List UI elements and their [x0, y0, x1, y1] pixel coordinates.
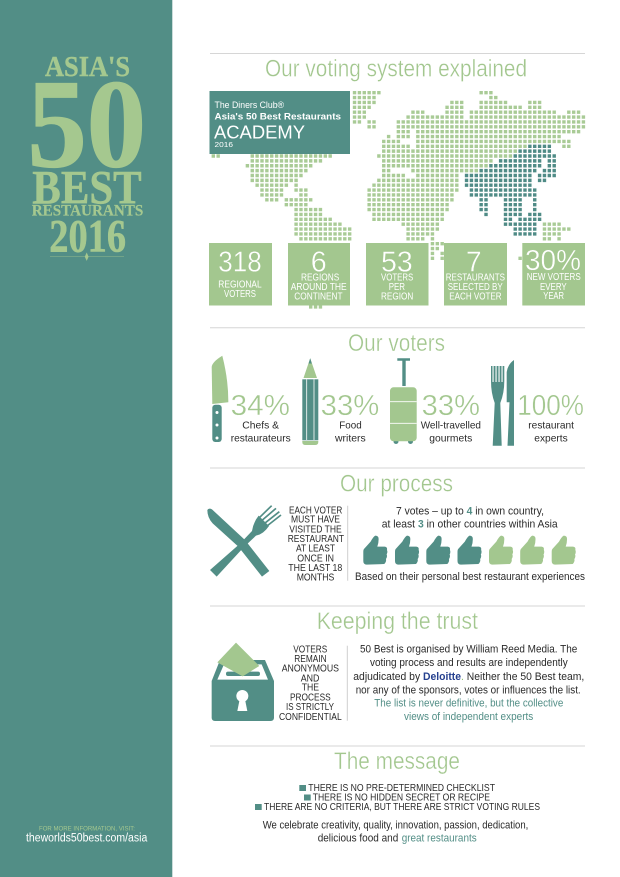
footer link: [26, 826, 148, 845]
stat: 30% new voters: YEAR: [543, 291, 564, 302]
heading: our process: Our process: [340, 470, 453, 498]
stat: 30% new voters: EVERY: [540, 282, 567, 293]
panel: academy title box: The Diners Club®: [214, 100, 284, 111]
text: visit requirement: RESTAURANT: [288, 534, 344, 545]
stat: 7 restaurants selected: RESTAURANTS: [446, 273, 505, 284]
text: closing statement: great restaurants: [402, 833, 477, 845]
icon: ballot box with lock: [212, 643, 274, 721]
icon: fork and knife: [491, 360, 514, 446]
stat: 6 regions: 6: [311, 247, 327, 279]
text: voters anonymous: [279, 645, 342, 723]
text: closing statement: [263, 819, 528, 845]
panel: academy title box: [210, 91, 350, 154]
text: visit requirement: AT LEAST: [296, 544, 335, 555]
list: message bullets: THERE IS NO PRE-DETERMINED CHECKLIST: [308, 783, 495, 794]
text: organisation paragraph: The list is never definitive, but the collective: [374, 698, 563, 710]
icon: suitcase: [390, 358, 417, 444]
text: voters anonymous: ANONYMOUS: [282, 664, 339, 675]
stat: 33% food writers: Food: [339, 419, 362, 431]
stat: 318 regional voters: VOTERS: [224, 289, 256, 300]
text: visit requirement: MUST HAVE: [291, 515, 340, 526]
stat: 34% chefs: 34%: [231, 390, 290, 422]
list: message bullets: THERE IS NO HIDDEN SECRET OR RECIPE: [313, 792, 490, 803]
panel: sidebar: [0, 0, 172, 877]
stat: 34% chefs: [231, 390, 291, 445]
text: voters anonymous: THE: [302, 683, 319, 694]
text: votes rule: [382, 505, 559, 531]
icon row: seven thumbs up: [363, 536, 576, 565]
logo: Asia's 50 Best Restaurants 2016: ASIA'S: [45, 52, 130, 83]
stat: 53 voters per region: VOTERS: [381, 273, 413, 284]
heading: the message: The message: [334, 748, 460, 775]
stat: 34% chefs: Chefs &: [242, 419, 279, 431]
text: personal experiences: Based on their personal best restaurant experiences: [355, 571, 585, 583]
panel: academy title box: 2016: [214, 140, 233, 149]
stat: 7 restaurants selected: [444, 243, 507, 306]
text: organisation paragraph: voting process and results are independently: [370, 657, 568, 669]
stat: 33% food writers: [321, 390, 379, 445]
text: voters anonymous: CONFIDENTIAL: [279, 712, 342, 723]
icon: chef knife: [212, 356, 228, 442]
text: voters anonymous: REMAIN: [294, 654, 327, 665]
stat: 33% food writers: 33%: [321, 390, 379, 422]
icon: pencil: [302, 358, 318, 445]
text: closing statement: delicious food and: [318, 833, 398, 845]
stat: 6 regions: CONTINENT: [294, 292, 343, 303]
stat: 6 regions: REGIONS: [301, 273, 339, 284]
footer link: FOR MORE INFORMATION, VISIT:: [39, 826, 135, 833]
heading: keeping the trust: Keeping the trust: [317, 608, 478, 635]
stat: 33% gourmets: [421, 390, 481, 445]
stat: 7 restaurants selected: 7: [466, 247, 482, 279]
logo: Asia's 50 Best Restaurants 2016: 2016: [49, 211, 126, 263]
stat: 53 voters per region: REGION: [381, 292, 413, 303]
stat: 318 regional voters: 318: [218, 247, 262, 279]
stat: 33% gourmets: gourmets: [429, 433, 472, 445]
text: closing statement: We celebrate creativity, quality, innovation, passion, dedication,: [263, 819, 528, 831]
text: votes rule: at least 3 in other countries within Asia: [382, 519, 559, 531]
stat: 30% new voters: [522, 243, 585, 306]
text: organisation paragraph: 50 Best is organised by William Reed Media. The: [360, 644, 577, 656]
stat: 53 voters per region: [366, 243, 428, 306]
heading: our voting system explained: Our voting system explained: [265, 56, 527, 82]
stat: 6 regions: [288, 243, 350, 306]
stat: 33% gourmets: 33%: [422, 390, 480, 422]
text: visit requirement: ONCE IN: [297, 553, 334, 564]
stat: 53 voters per region: 53: [381, 247, 413, 279]
text: visit requirement: THE LAST 18: [288, 563, 343, 574]
stat: 6 regions: AROUND THE: [291, 282, 347, 293]
stat: 100% experts: experts: [534, 433, 568, 445]
logo: Asia's 50 Best Restaurants 2016: BEST: [32, 161, 142, 214]
stat: 100% experts: restaurant: [528, 419, 574, 431]
logo: Asia's 50 Best Restaurants 2016: RESTAURANTS: [32, 202, 143, 219]
heading: our voters: Our voters: [348, 330, 445, 357]
stat: 30% new voters: NEW VOTERS: [527, 272, 581, 283]
text: voters anonymous: PROCESS: [290, 692, 331, 703]
stat: 100% experts: 100%: [517, 390, 584, 422]
text: voters anonymous: AND: [301, 673, 319, 684]
stat: 318 regional voters: [209, 243, 272, 306]
text: organisation paragraph: [353, 644, 584, 723]
text: voters anonymous: IS STRICTLY: [286, 702, 334, 713]
stat: 100% experts: [517, 390, 584, 445]
panel: academy title box: ACADEMY: [214, 121, 305, 142]
text: visit requirement: [288, 505, 344, 584]
text: voters anonymous: VOTERS: [293, 645, 328, 656]
stat: 33% gourmets: Well-travelled: [421, 419, 481, 431]
text: visit requirement: EACH VOTER: [289, 505, 342, 516]
logo: Asia's 50 Best Restaurants 2016: [28, 52, 146, 263]
dotted world map: [212, 93, 587, 307]
stat: 7 restaurants selected: SELECTED BY: [448, 282, 503, 293]
text: visit requirement: MONTHS: [297, 573, 335, 584]
panel: academy title box: Asia's 50 Best Restaurants: [214, 112, 341, 122]
list: message bullets: THERE ARE NO CRITERIA, BUT THERE ARE STRICT VOTING RULES: [264, 802, 540, 813]
text: organisation paragraph: nor any of the sponsors, votes or influences the list.: [356, 684, 581, 696]
text: votes rule: 7 votes – up to 4 in own country,: [396, 505, 544, 517]
logo: Asia's 50 Best Restaurants 2016: 50: [28, 56, 146, 194]
stat: 7 restaurants selected: EACH VOTER: [449, 292, 502, 303]
text: organisation paragraph: adjudicated by Deloitte. Neither the 50 Best team,: [353, 671, 584, 683]
stat: 53 voters per region: PER: [389, 282, 405, 293]
text: organisation paragraph: views of independent experts: [404, 711, 534, 723]
text: visit requirement: VISITED THE: [289, 524, 342, 535]
list: message bullets: [255, 783, 540, 813]
stat: 30% new voters: 30%: [525, 245, 581, 277]
stat: 33% food writers: writers: [334, 433, 366, 445]
stat: 318 regional voters: REGIONAL: [218, 280, 262, 291]
icon: crossed knife and fork: [207, 506, 281, 577]
footer link: theworlds50best.com/asia: [26, 833, 148, 845]
stat: 34% chefs: restaurateurs: [231, 433, 291, 445]
